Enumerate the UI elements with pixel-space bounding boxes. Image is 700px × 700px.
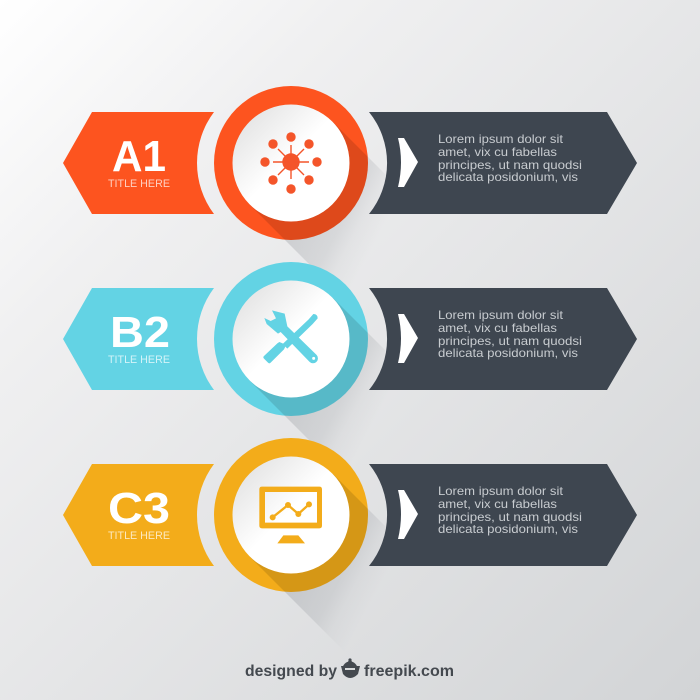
inner circle B2 [232,280,350,398]
body text B2: amet, vix cu fabellas [438,321,557,335]
ring B2 [214,262,368,416]
label A1: A1 [112,132,166,181]
long shadow B2 [250,298,452,500]
row A1 [63,86,637,274]
icon: network [260,132,322,194]
body text C3: amet, vix cu fabellas [438,497,557,511]
arrow B2 [398,314,418,363]
body text B2: principes, ut nam quodsi [438,334,582,348]
body text B2: Lorem ipsum dolor sit [438,308,564,322]
label C3: C3 [108,484,170,533]
body text B2: delicata posidonium, vis [438,346,578,360]
body text C3: principes, ut nam quodsi [438,510,582,524]
subtitle C3: TITLE HERE [108,530,170,542]
left ribbon B2 [63,288,214,390]
body text A1: principes, ut nam quodsi [438,158,582,172]
arrow C3 [398,490,418,539]
footer text: freepik.com: freepik.com [364,663,454,680]
subtitle B2: TITLE HERE [108,354,170,366]
footer text: designed by: designed by [245,663,337,680]
icon: freepik logo [341,658,360,678]
inner circle A1 [232,104,350,222]
ring shadow C3 [250,474,368,592]
long shadow C3 [250,474,452,676]
row B2 [63,262,637,450]
left ribbon A1 [63,112,214,214]
left ribbon C3 [63,464,214,566]
body text C3 [438,484,582,536]
label B2: B2 [110,308,170,357]
ring A1 [214,86,368,240]
body text A1: delicata posidonium, vis [438,170,578,184]
subtitle A1: TITLE HERE [108,178,170,190]
ring C3 [214,438,368,592]
dark ribbon C3 [369,464,637,566]
row C3 [63,438,637,633]
body text B2 [438,308,582,360]
icon: wrench and screwdriver [263,310,318,363]
body text A1 [438,132,582,184]
footer credit [245,658,454,680]
body text C3: Lorem ipsum dolor sit [438,484,564,498]
dark ribbon B2 [369,288,637,390]
icon: monitor with line chart [259,487,322,543]
ring shadow A1 [250,122,368,240]
body text C3: delicata posidonium, vis [438,522,578,536]
body text A1: amet, vix cu fabellas [438,145,557,159]
arrow A1 [398,138,418,187]
long shadow A1 [250,122,452,324]
body text A1: Lorem ipsum dolor sit [438,132,564,146]
inner circle C3 [232,456,350,574]
dark ribbon A1 [369,112,637,214]
ring shadow B2 [250,298,368,416]
